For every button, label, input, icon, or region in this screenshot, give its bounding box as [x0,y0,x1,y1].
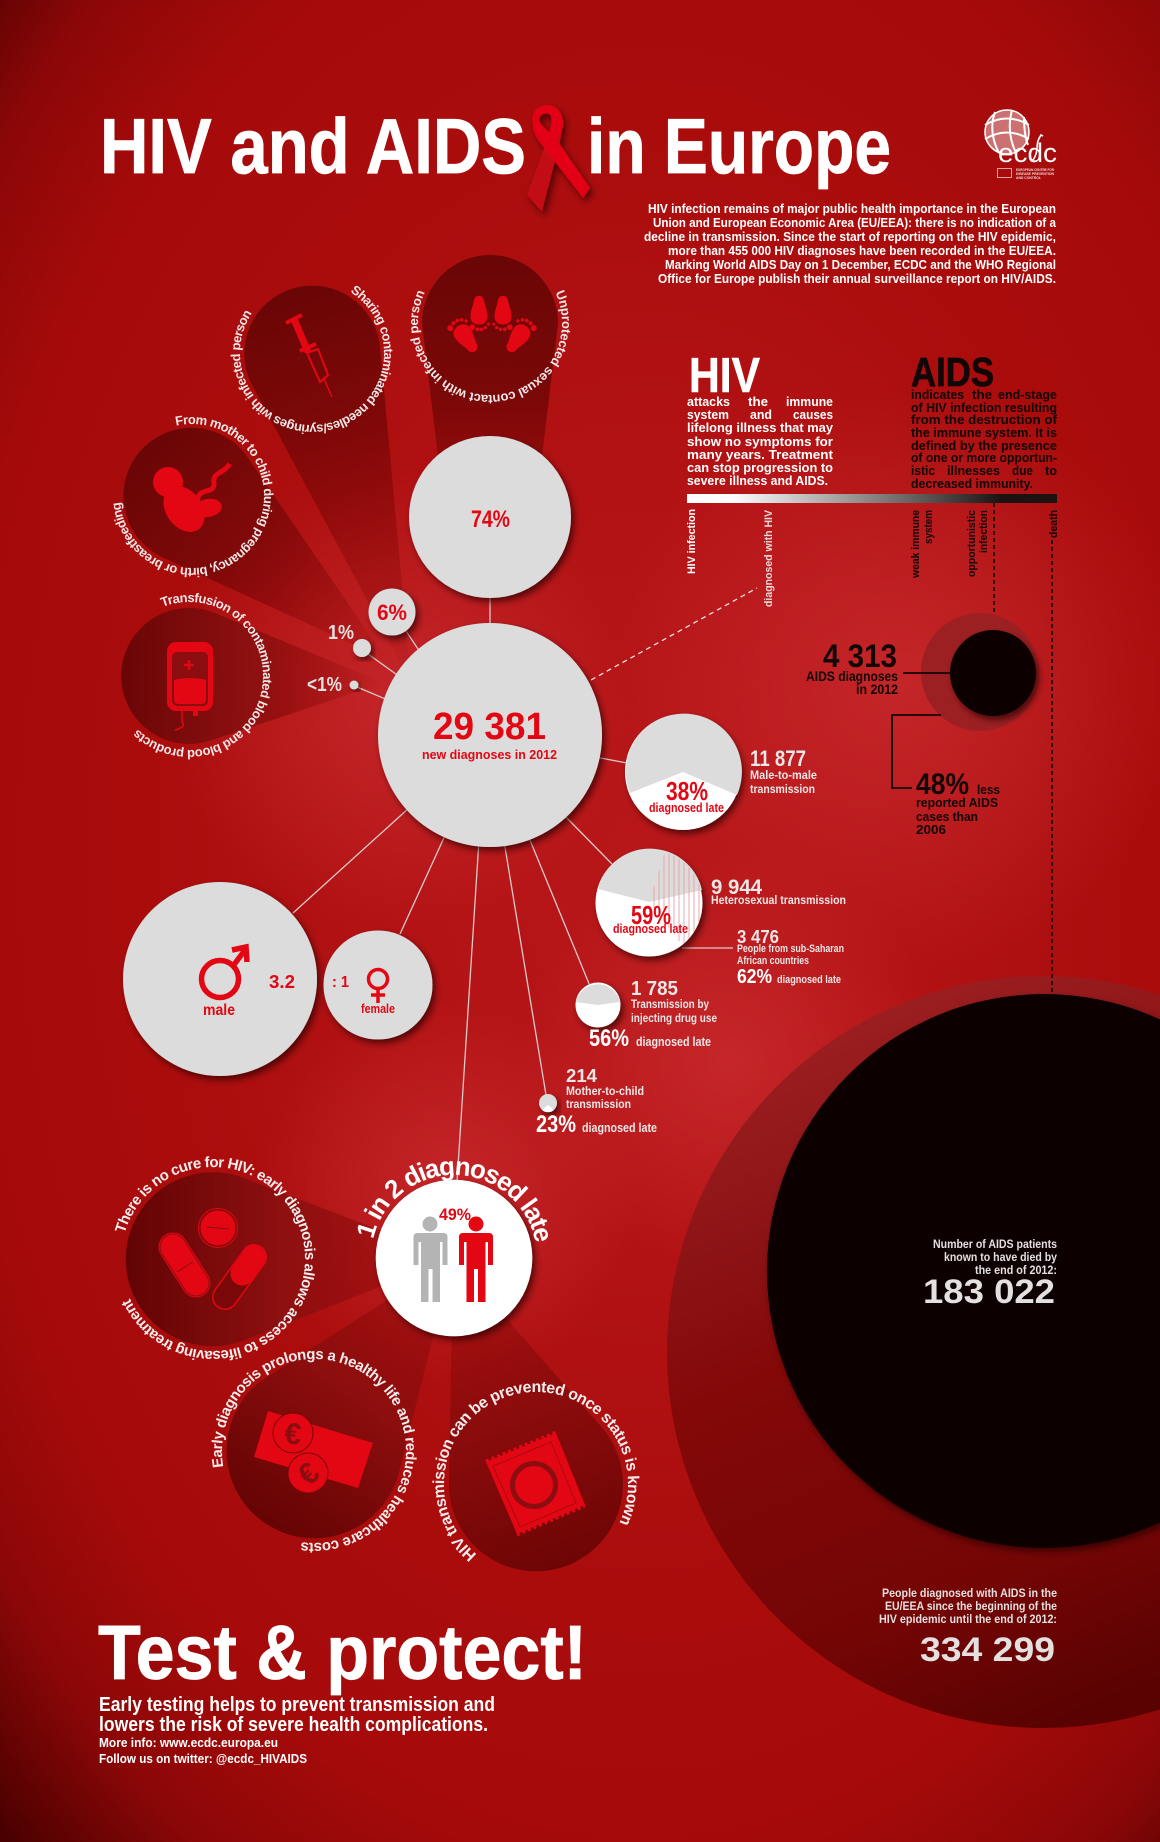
call to action: test and protect: More info: www.ecdc.europa.eu [99,1735,278,1750]
icon: banknote and coins [254,1411,373,1493]
connector lines [293,597,733,1182]
main circle: new diagnoses [378,623,602,847]
panel: AIDS definition: of one or more opportun- [911,450,1057,465]
circle: mother-to-child [539,1094,557,1112]
circle: 1 in 2 diagnosed late [358,1161,548,1345]
panel: HIV definition: HIV [689,349,760,403]
dashed line: death [1051,540,1053,996]
label: AIDS deaths: 183 022 [923,1273,1055,1311]
panel: HIV definition: causes [793,407,833,422]
label: 48% less: reported AIDS [916,795,998,810]
label: injecting drug use: 1 785 [631,978,678,1000]
circle: female: : 1 [332,974,349,991]
circle: 74%: 74% [471,506,510,533]
label: AIDS deaths: known to have died by [944,1250,1057,1264]
icon: condom packet [486,1432,585,1535]
icon: male symbol [202,947,247,998]
timeline labels: opportunistic [966,510,978,577]
panel: AIDS definition [911,349,1058,491]
intro text [644,202,1057,286]
logo: ECDC: DISEASE PREVENTION [1016,171,1054,176]
cone and circle: no cure [114,1156,381,1360]
icon: blood bag [167,642,213,730]
panel: HIV definition: lifelong illness that may [687,420,834,435]
cone and circle: healthcare costs [212,1300,434,1553]
panel: HIV definition: severe illness and AIDS. [687,473,828,488]
circle: AIDS diagnoses 2012 [950,630,1036,716]
progression gradient bar [687,494,1057,503]
circle: 1%: 1% [328,622,354,644]
curved heading: 1 in 2 diagnosed late: 1 in 2 diagnosed late [358,1161,548,1242]
panel: HIV definition: show no symptoms for [687,434,833,449]
circle: male-to-male [625,714,742,830]
label: AIDS deaths: the end of 2012: [975,1263,1057,1277]
timeline labels: death [1048,510,1060,538]
dashed line to diagnosed with HIV [591,588,757,680]
label: AIDS deaths: Number of AIDS patients [933,1237,1057,1251]
timeline labels: system [923,510,935,544]
panel: AIDS definition: the [972,387,992,402]
label: mother-to-child: 23% [536,1111,576,1138]
label: injecting drug use [589,978,717,1052]
circle: reported AIDS 2006 [921,613,1039,731]
icon: banknote and coins: € [283,1417,303,1452]
panel: HIV definition [687,349,834,488]
title: HIV and AIDS [100,102,526,190]
panel: AIDS definition: due [1012,463,1033,478]
intro text: decline in transmission. Since the start of reporting on the HIV epidemic, [644,230,1056,244]
cone and circle: prevention [432,1319,640,1572]
label: injecting drug use: injecting drug use [631,1011,717,1025]
curved label: sharing needles: Sharing contaminated needles/syringes with infected person [230,286,392,434]
panel: HIV definition: attacks [687,394,730,409]
curved label: healthcare costs: Early diagnosis prolongs a healthy life and reduces healthcare costs [212,1351,417,1553]
panel: HIV definition: immune [786,394,833,409]
AIDS deaths black circle [767,994,1160,1548]
logo: ECDC: ecdc [998,138,1057,168]
label: total AIDS diagnoses: 334 299 [920,1631,1055,1669]
cone and circle: sharing needles [230,286,402,644]
circle: under 1%: <1% [307,674,342,696]
call to action: test and protect: Follow us on twitter: @ecdc_HIVAIDS [99,1751,307,1766]
label: heterosexual: 9 944 [711,876,762,899]
label: male-to-male: transmission [750,782,815,796]
circle: 6%: 6% [377,600,407,625]
circle: heterosexual: 59% [631,900,671,930]
timeline labels: weak immune [910,510,922,579]
label: injecting drug use: Transmission by [631,997,709,1011]
logo: ECDC: AND CONTROL [1016,175,1041,180]
label: total AIDS diagnoses: People diagnosed with AIDS in the [882,1586,1057,1600]
curved label: mother to child: From mother to child during pregnancy, birth or breastfeeding [114,416,274,578]
label: 48% less: less [977,782,1000,797]
panel: AIDS definition: illnesses [947,463,1000,478]
icon: red person [459,1216,493,1302]
timeline labels [686,509,1060,607]
intro text: HIV infection remains of major public health importance in the European [648,202,1056,216]
label: AIDS deaths [923,1237,1057,1311]
label: male-to-male [750,746,817,796]
circle: 6% [368,588,416,636]
circle: female [324,930,432,1040]
label: sub-Saharan Africa [737,927,844,988]
timeline labels: infection [978,510,990,553]
logo: ECDC: EUROPEAN CENTRE FOR [1016,167,1054,172]
cone and circle: unprotected sexual contact [410,255,570,455]
panel: HIV definition: system [687,407,729,422]
icon: pills [173,1208,254,1297]
label: mother-to-child: Mother-to-child [566,1084,644,1098]
circle: 1% [328,622,371,657]
circle: heterosexual: diagnosed late [613,921,688,936]
panel: AIDS definition: indicates [911,387,964,402]
main circle: new diagnoses: 29 381 [433,706,546,748]
circle: male: 3.2 [269,972,295,992]
circle: male-to-male: diagnosed late [649,800,724,815]
circle: injecting drug use [576,982,620,1028]
cone and circle: mother to child [114,416,369,644]
label: heterosexual: Heterosexual transmission [711,893,846,907]
title [100,102,891,190]
icon: grey person [414,1216,448,1302]
label: 48% less: 48% [916,768,969,801]
curved label: transfusion: Transfusion of contaminated blood and blood products [134,593,272,760]
panel: HIV definition: the [748,394,768,409]
circle: male [123,882,317,1076]
dashed line: opportunistic infection [993,503,995,632]
label: AIDS diagnoses: 4 313 [823,638,897,674]
label: AIDS diagnoses: AIDS diagnoses [806,668,898,684]
icon: red ribbon [527,105,590,212]
cone and circle: transfusion [121,593,362,760]
circle: 74% [409,436,571,598]
icon: female symbol [368,970,388,1003]
label: sub-Saharan Africa: African countries [737,955,809,967]
circle: 1 in 2 diagnosed late: 49% [439,1205,471,1224]
label: sub-Saharan Africa: People from sub-Saharan [737,943,844,955]
curved label: prevention: HIV transmission can be prevented once status is known [432,1382,640,1562]
icon: footprints [445,296,539,357]
call to action: test and protect: lowers the risk of severe health complications. [99,1714,488,1736]
panel: AIDS definition: istic [911,463,935,478]
call to action: test and protect [98,1610,587,1766]
curved label: unprotected sexual contact: Unprotected sexual contact with infected person [410,290,570,404]
intro text: Office for Europe publish their annual surveillance report on HIV/AIDS. [658,272,1056,286]
label: total AIDS diagnoses: EU/EEA since the beginning of the [885,1599,1057,1613]
label: AIDS diagnoses [806,638,951,697]
label: mother-to-child: 214 [566,1066,597,1086]
total AIDS diagnoses outer circle [667,976,1160,1728]
logo: ECDC [985,110,1057,180]
label: heterosexual [711,876,846,907]
call to action: test and protect: Test & protect! [98,1610,587,1696]
panel: AIDS definition: AIDS [911,349,994,395]
panel: HIV definition: can stop progression to [687,460,833,475]
circle: heterosexual [596,845,702,960]
label: male-to-male: Male-to-male [750,768,817,782]
label: total AIDS diagnoses [879,1586,1057,1669]
label: injecting drug use: 56% [589,1025,629,1052]
circle: male: male [203,1002,235,1019]
panel: HIV definition: and [750,407,772,422]
label: AIDS diagnoses: in 2012 [856,681,898,697]
label: sub-Saharan Africa: 62% [737,966,772,988]
label: injecting drug use: diagnosed late [636,1034,711,1049]
curved label: no cure: There is no cure for HIV: early diagnosis allows access to lifesaving treatment [114,1156,316,1360]
label: 48% less: 2006 [916,822,946,837]
timeline labels: HIV infection [686,509,698,574]
panel: AIDS definition: decreased immunity. [911,476,1033,491]
label: male-to-male: 11 877 [750,746,806,771]
panel: AIDS definition: end-stage [998,387,1057,402]
icon: fetus [153,464,230,540]
panel: AIDS definition: from the destruction of [911,412,1058,427]
label: total AIDS diagnoses: HIV epidemic until the end of 2012: [879,1612,1057,1626]
call to action: test and protect: Early testing helps to prevent transmission and [99,1694,495,1716]
intro text: more than 455 000 HIV diagnoses have been recorded in the EU/EEA. [668,244,1056,258]
icon: banknote and coins: € [292,1456,326,1492]
icon: syringe [286,315,332,397]
panel: HIV definition: many years. Treatment [687,447,834,462]
label: mother-to-child [536,1066,657,1138]
intro text: Marking World AIDS Day on 1 December, ECDC and the WHO Regional [665,258,1056,272]
circle: female: female [361,1001,395,1016]
panel: AIDS definition: to [1045,463,1057,478]
main circle: new diagnoses: new diagnoses in 2012 [422,747,557,762]
label: 48% less [892,715,1000,837]
label: sub-Saharan Africa: 3 476 [737,927,779,947]
label: mother-to-child: transmission [566,1097,631,1111]
label: mother-to-child: diagnosed late [582,1120,657,1135]
panel: AIDS definition: of HIV infection resulting [911,400,1057,415]
intro text: Union and European Economic Area (EU/EEA): there is no indication of a [653,216,1057,230]
circle: male-to-male: 38% [666,776,708,806]
label: sub-Saharan Africa: diagnosed late [777,974,841,986]
title: in Europe [587,102,891,190]
panel: AIDS definition: the immune system. It is [911,425,1057,440]
label: 48% less: cases than [916,809,978,824]
timeline labels: diagnosed with HIV [763,509,775,607]
panel: AIDS definition: defined by the presence [911,438,1057,453]
